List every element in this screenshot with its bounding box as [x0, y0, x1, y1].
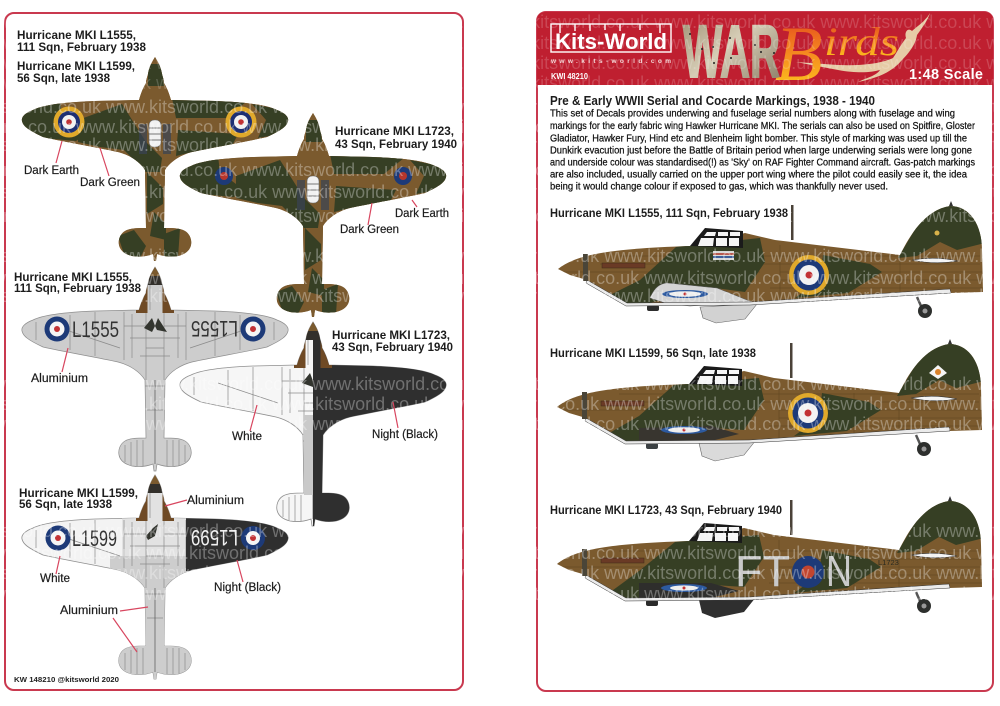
product code: KWI 48210: [551, 71, 588, 81]
description text block: are also included, usually carried on the upper port wing where the pilot could easily see it, the idea: [550, 168, 967, 180]
aircraft: top view L1723 camouflage: [173, 106, 453, 321]
caption: top view left: 111 Sqn, February 1938: [17, 40, 146, 54]
panel: right sheet border: [537, 12, 993, 691]
caption: underside L1723: 43 Sqn, February 1940: [332, 340, 453, 354]
caption: top view right: 43 Sqn, February 1940: [335, 137, 457, 151]
aircraft: underside L1555 aluminium: [22, 265, 288, 471]
aircraft: underside L1599 white night aluminium: L1599: [72, 526, 117, 551]
caption: side view L1599: Hurricane MKI L1599, 56 Sqn, late 1938: [550, 346, 756, 360]
copyright: KW 148210 @kitsworld 2020: [14, 675, 119, 684]
callouts: underside L1599 colours: White: [40, 573, 70, 585]
callout: aluminium: Aluminium: [31, 373, 88, 385]
caption: top view right: [335, 124, 457, 151]
caption: top view left: Hurricane MKI L1555,: [17, 28, 136, 42]
callouts: white and night: Night (Black): [372, 429, 438, 441]
callouts: top view left colours: [24, 141, 140, 189]
pin-up figure: [796, 13, 930, 82]
caption: side view L1723: Hurricane MKI L1723, 43 Sqn, February 1940: [550, 503, 782, 517]
caption: top view left: [17, 28, 146, 85]
logo: War Birds: [683, 10, 930, 97]
panel: header banner: [537, 10, 993, 97]
callouts: top view left colours: Dark Green: [80, 177, 140, 189]
caption: underside L1555: [14, 270, 141, 295]
aircraft: side view L1723: N: [826, 547, 852, 596]
callouts: white and night: [232, 402, 438, 443]
aircraft: underside L1599 white night aluminium: [22, 468, 296, 681]
callouts: underside L1599 colours: [40, 495, 281, 652]
logo: Kits-World sprue frame: [550, 24, 671, 65]
caption: top view left: 56 Sqn, late 1938: [17, 71, 110, 85]
logo: Kits-World sprue frame: Kits-World: [555, 29, 667, 54]
aircraft: side view L1555: [558, 200, 985, 323]
logo: War Birds: B: [775, 10, 823, 97]
aircraft: underside L1599 white night aluminium: L1599: [191, 525, 238, 550]
heading: Pre & Early WWII Serial and Cocarde Markings, 1938 - 1940: [550, 93, 875, 108]
aircraft: side view L1723: [557, 495, 984, 618]
logo: War Birds: WAR: [683, 10, 780, 93]
aircraft: side view L1599: [557, 338, 984, 461]
logo: Kits-World sprue frame: www.kits-world.com: [550, 58, 671, 65]
logo: War Birds: irds: [824, 19, 899, 64]
aircraft: underside L1555 aluminium: L1555: [72, 317, 119, 342]
callouts: top view right colours: [340, 200, 449, 236]
caption: underside L1723: [332, 328, 453, 354]
callout: aluminium: [31, 348, 88, 385]
callouts: top view right colours: Dark Green: [340, 224, 399, 236]
caption: top view right: Hurricane MKI L1723,: [335, 124, 454, 138]
scale: 1:48 Scale: [909, 67, 983, 83]
panel: left sheet border: [5, 13, 463, 690]
callouts: top view right colours: Dark Earth: [395, 208, 449, 220]
callouts: underside L1599 colours: Aluminium: [60, 605, 118, 617]
callouts: white and night: White: [232, 431, 262, 443]
description text block: [550, 108, 975, 192]
caption: underside L1599: Hurricane MKI L1599,: [19, 486, 138, 500]
callouts: underside L1599 colours: Night (Black): [214, 582, 281, 594]
aircraft: side view L1723: L1723: [878, 558, 899, 567]
description text block: being it would change colour if exposed to gas, which was thankfully never used.: [550, 180, 888, 192]
caption: underside L1555: Hurricane MKI L1555,: [14, 270, 132, 284]
aircraft: side view L1723: FT: [735, 547, 790, 596]
description text block: This set of Decals provides underwing and fuselage serial numbers along with fuselage and wing: [550, 108, 955, 120]
aircraft: underside L1723 white and night: [180, 315, 453, 530]
caption: underside L1555: 111 Sqn, February 1938: [14, 281, 141, 295]
aircraft: underside L1555 aluminium: L1555: [191, 316, 238, 341]
caption: underside L1723: Hurricane MKI L1723,: [332, 328, 450, 342]
caption: top view left: Hurricane MKI L1599,: [17, 59, 135, 73]
callouts: top view left colours: Dark Earth: [24, 165, 79, 177]
callouts: underside L1599 colours: Aluminium: [187, 495, 244, 507]
aircraft: top view L1555/L1599 camouflage: [15, 50, 295, 265]
caption: underside L1599: [19, 486, 138, 511]
caption: underside L1599: 56 Sqn, late 1938: [19, 497, 112, 511]
caption: side view L1555: Hurricane MKI L1555, 111 Sqn, February 1938: [550, 206, 788, 220]
